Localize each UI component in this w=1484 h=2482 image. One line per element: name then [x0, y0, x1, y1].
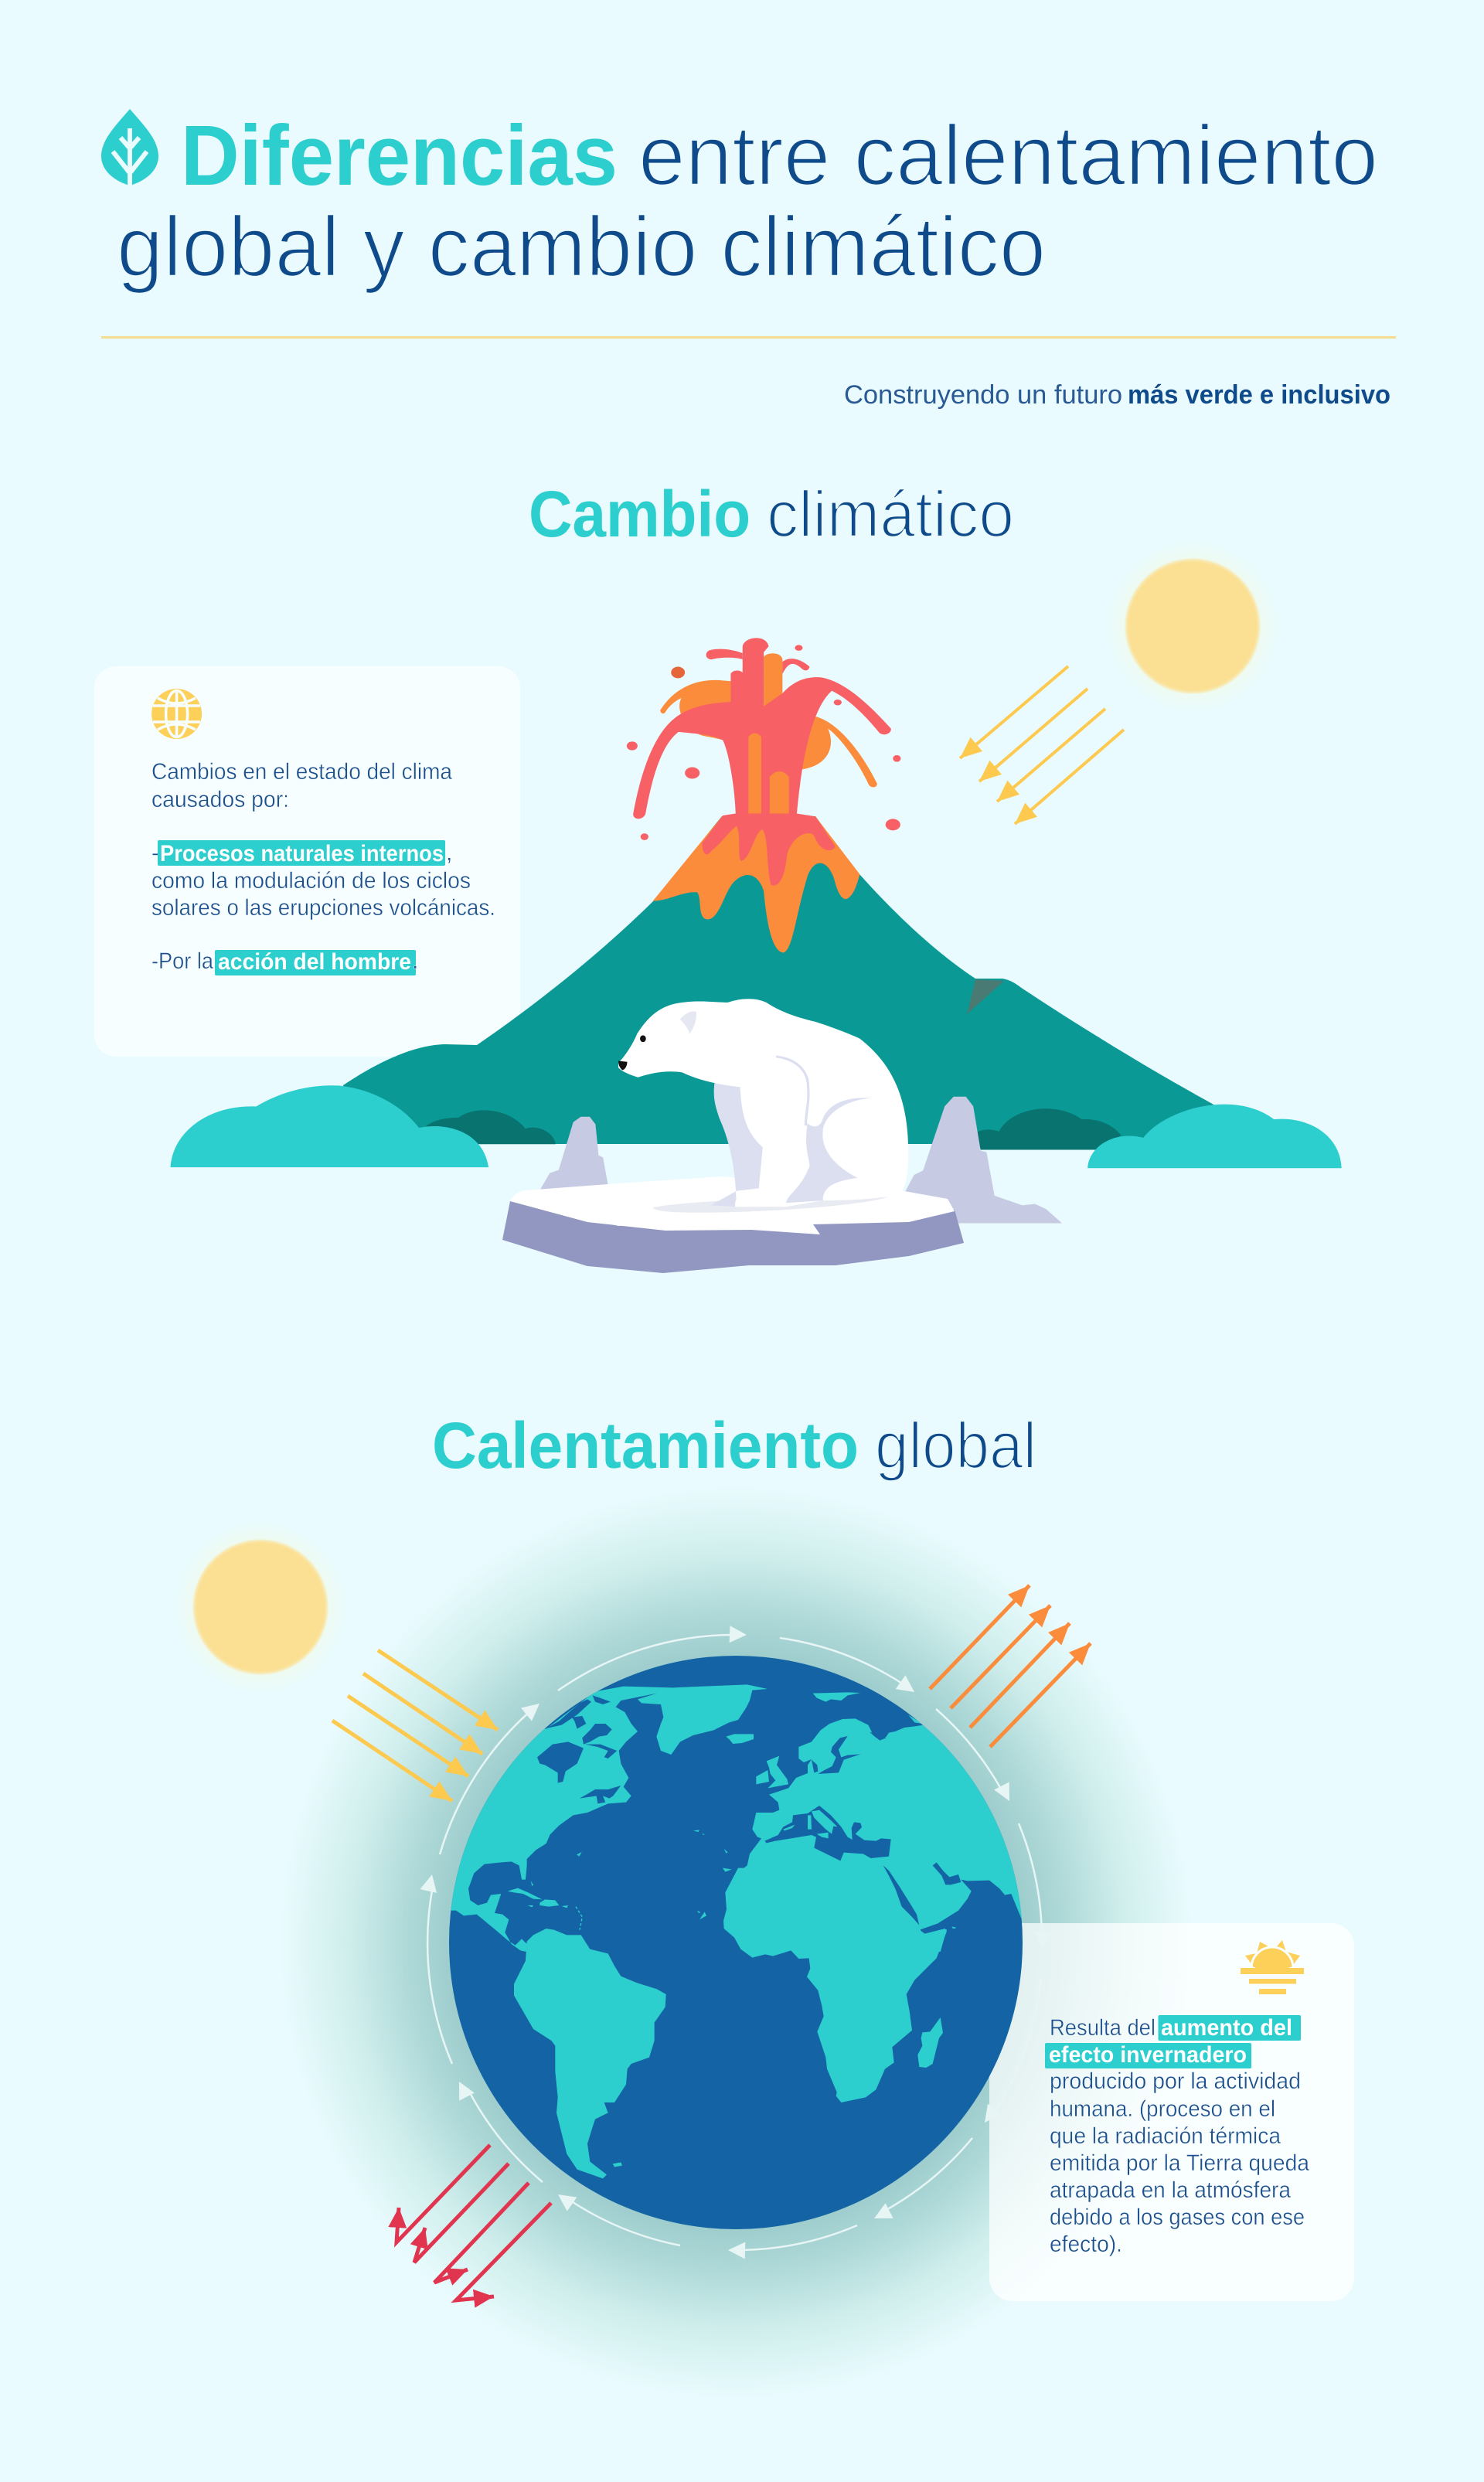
globe — [431, 1656, 1030, 2229]
heading: cambio climático: climático — [767, 478, 1014, 550]
header — [101, 108, 1396, 410]
text: description: solares o las erupciones volcánicas. — [151, 895, 495, 921]
baltic sea — [812, 1736, 860, 1774]
volcano grey spot — [967, 979, 1004, 1014]
text: description: efecto). — [1050, 2232, 1122, 2257]
landmass: europe and asia — [726, 1692, 1030, 1952]
icon: leaf — [101, 109, 158, 186]
title: entre calentamiento — [638, 108, 1378, 203]
heading: cambio climático: Cambio — [529, 478, 751, 550]
atmosphere glow — [280, 1486, 1192, 2399]
panel: calentamiento global text card — [989, 1923, 1354, 2301]
arrows: outgoing orange rays — [930, 1585, 1091, 1747]
mountain — [343, 816, 1215, 1144]
mediterranean sea — [764, 1806, 891, 1861]
text: description: , — [446, 840, 452, 866]
icon: sun top — [1106, 540, 1279, 713]
volcano lava — [627, 638, 900, 952]
red sea — [883, 1865, 919, 1925]
text: description: emitida por la Tierra queda — [1050, 2150, 1309, 2176]
text: description: Resulta del — [1050, 2015, 1156, 2041]
text: description: -Por la — [151, 948, 213, 974]
text: description — [1045, 2015, 1309, 2257]
volcano illustration scene — [171, 638, 1342, 1273]
hudson bay — [537, 1741, 584, 1783]
text: description: atrapada en la atmósfera — [1050, 2177, 1291, 2203]
subtitle: más verde e inclusivo — [1128, 380, 1390, 410]
text: description — [151, 759, 495, 975]
landmass: africa — [723, 1868, 947, 2102]
text: description: . — [412, 948, 418, 974]
white sea — [870, 1732, 887, 1741]
icon: sun bottom — [174, 1520, 347, 1694]
arrows: yellow sun rays — [960, 666, 1124, 824]
arrows: red bouncing rays — [397, 2145, 551, 2300]
title: global y cambio climático — [117, 199, 1046, 295]
panel: cambio climático text card — [94, 666, 520, 1057]
text: description: - — [151, 840, 159, 866]
title — [117, 108, 1378, 295]
caribbean and atlantic islands — [508, 1830, 732, 1930]
landmass: americas north and greenland — [431, 1684, 768, 1952]
text: description: efecto invernadero — [1049, 2042, 1247, 2068]
subtitle — [844, 380, 1390, 410]
heading: calentamiento global: Calentamiento — [432, 1409, 859, 1482]
text: description: como la modulación de los ciclos — [151, 868, 471, 894]
heading: cambio climático — [529, 478, 1014, 550]
text: description: acción del hombre — [218, 949, 411, 975]
text: description: producido por la actividad — [1050, 2068, 1301, 2094]
text: description: Cambios en el estado del clima — [151, 759, 452, 785]
icon: sun over horizon — [1241, 1940, 1304, 1994]
heading: calentamiento global: global — [875, 1409, 1036, 1482]
text: description: humana. (proceso en el — [1050, 2096, 1275, 2122]
icon: globe — [151, 689, 202, 739]
european islands and peninsulas — [726, 1692, 956, 1929]
dark bushes — [426, 1108, 1122, 1150]
ice rocks — [539, 1097, 1062, 1223]
arrows: incoming yellow rays — [332, 1650, 498, 1801]
text: description: causados por: — [151, 787, 289, 812]
landmass: south america — [514, 1929, 666, 2178]
text: description: que la radiación térmica — [1050, 2123, 1281, 2149]
text: description: aumento del — [1161, 2015, 1292, 2041]
text: description: debido a los gases con ese — [1050, 2205, 1305, 2230]
persian gulf — [933, 1862, 961, 1884]
polar bear — [618, 999, 908, 1207]
text: description: Procesos naturales internos — [160, 841, 444, 866]
arrows: white circulation ring — [420, 1626, 1051, 2259]
clouds — [171, 1085, 1342, 1168]
ice floe — [502, 1176, 964, 1273]
subtitle: Construyendo un futuro — [844, 380, 1122, 410]
gulf of st lawrence — [580, 1786, 621, 1803]
arctic channels — [546, 1695, 617, 1759]
title: Diferencias — [181, 108, 618, 203]
